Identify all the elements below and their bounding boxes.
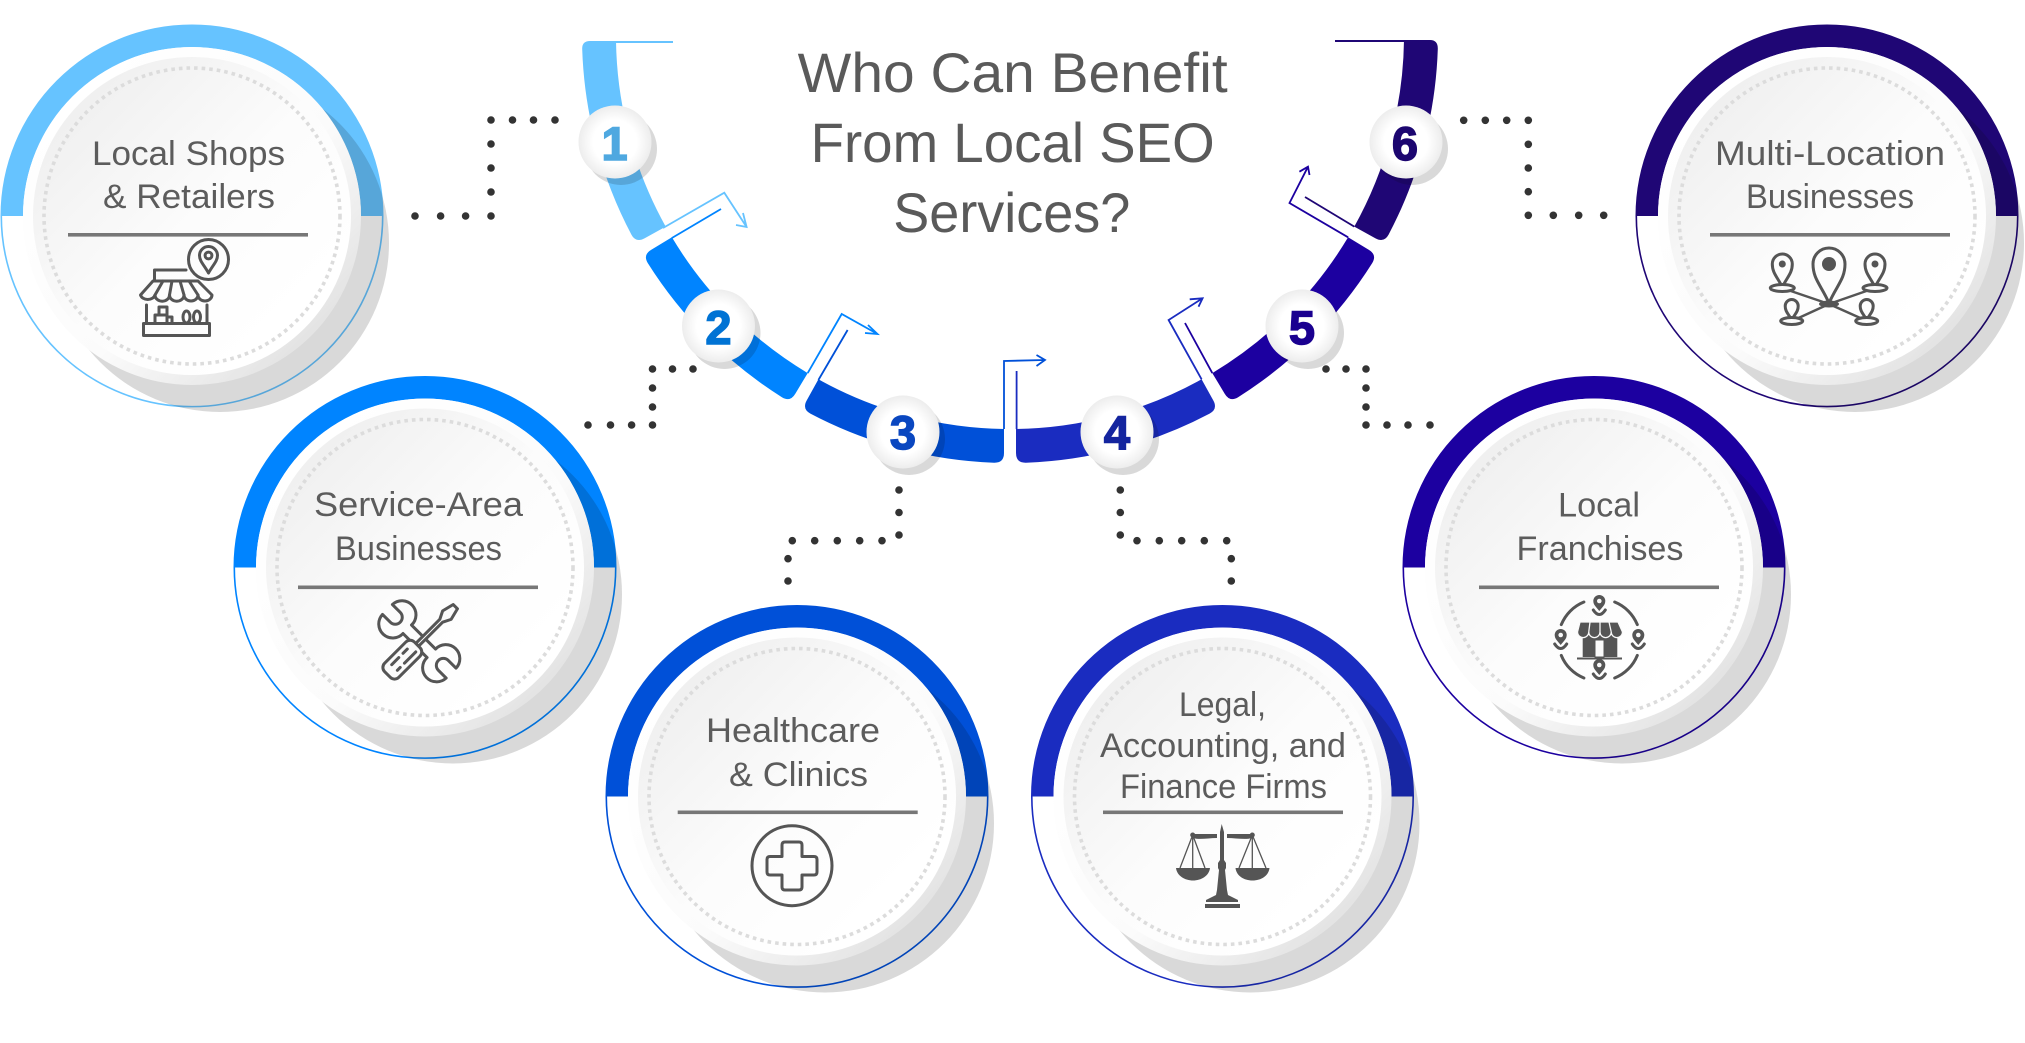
panel: legal, accounting and finance firms xyxy=(1031,605,1420,992)
arrow 5 shadow line xyxy=(1305,197,1354,227)
badge 3 xyxy=(866,396,945,475)
panel: legal, accounting and finance firms: Finance Firms xyxy=(1120,768,1327,806)
title: Services? xyxy=(893,181,1130,244)
ring band xyxy=(606,605,988,796)
top accent line right xyxy=(1335,40,1405,42)
drop shadow xyxy=(1686,74,2024,412)
panel: local franchises xyxy=(1402,376,1791,764)
ring band xyxy=(1402,376,1786,568)
dotted connector 5 xyxy=(1322,365,1434,429)
thin outline xyxy=(234,568,616,758)
badge 6 xyxy=(1370,106,1448,185)
title: From Local SEO xyxy=(811,111,1215,174)
label: Local Shops xyxy=(92,135,285,173)
panel: healthcare and clinics: & Clinics xyxy=(729,756,868,794)
label: Multi-Location xyxy=(1715,135,1945,173)
dotted connector 6 xyxy=(1460,116,1607,219)
arc segment 3 xyxy=(805,379,1004,463)
arc segment 2 xyxy=(646,237,808,399)
thin outline xyxy=(1,216,383,407)
arc segment 6 xyxy=(1354,40,1438,240)
panel: local franchises: Franchises xyxy=(1516,530,1684,568)
badge 2: 2 xyxy=(705,301,732,354)
badge 3: 3 xyxy=(890,406,916,459)
drop shadow xyxy=(656,654,994,992)
badge 1 xyxy=(578,106,657,185)
divider xyxy=(1710,233,1950,237)
label: Service-Area xyxy=(314,486,523,524)
badge 5 xyxy=(1266,290,1344,369)
dotted connector 1 xyxy=(411,116,559,220)
panel: local shops and retailers xyxy=(0,24,389,412)
icon: network of pins xyxy=(1770,248,1887,324)
icon: scales of justice xyxy=(1176,824,1270,908)
disc xyxy=(23,47,361,385)
dotted connector 2 xyxy=(584,365,697,429)
icon: medical cross xyxy=(752,826,832,906)
badge 4 xyxy=(1080,396,1159,475)
dotted connector 3 xyxy=(784,486,903,585)
label: Legal, xyxy=(1179,686,1266,724)
divider xyxy=(678,810,918,814)
arrow 3 shadow line xyxy=(1016,371,1018,429)
panel: legal, accounting and finance firms: Accounting, and xyxy=(1100,727,1346,765)
ring band xyxy=(1636,24,2018,216)
badge 4: 4 xyxy=(1104,406,1130,459)
divider xyxy=(1103,810,1343,814)
drop shadow xyxy=(284,426,622,764)
panel: service-area businesses: Businesses xyxy=(335,530,502,568)
thin outline xyxy=(1032,796,1413,987)
divider xyxy=(298,586,538,589)
icon: store surrounded by pins xyxy=(1555,595,1644,678)
divider xyxy=(68,233,308,237)
arrow 4 xyxy=(1169,298,1203,379)
arrow 2 xyxy=(808,314,878,373)
arrow 1 shadow line xyxy=(672,209,721,238)
label: Healthcare xyxy=(706,712,880,750)
top accent line left xyxy=(615,41,673,43)
icon: shop with location pin xyxy=(140,240,228,336)
panel: multi-location businesses xyxy=(1636,24,2024,412)
badge 2 xyxy=(682,290,760,369)
panel: service-area businesses xyxy=(234,376,622,764)
dotted connector 4 xyxy=(1116,486,1235,585)
disc xyxy=(1425,398,1763,736)
title: Who Can Benefit xyxy=(798,41,1228,104)
panel: multi-location businesses: Businesses xyxy=(1746,178,1914,216)
disc xyxy=(628,628,966,966)
arrow 1 xyxy=(663,193,747,228)
thin outline xyxy=(606,796,988,987)
central arc of six segments xyxy=(582,40,1438,463)
disc xyxy=(1054,628,1392,966)
panel: local shops and retailers: & Retailers xyxy=(103,178,275,216)
drop shadow xyxy=(51,74,389,412)
badge 6: 6 xyxy=(1392,117,1418,170)
thin outline xyxy=(1636,216,2018,407)
badge 5: 5 xyxy=(1289,301,1315,354)
arrow 2 shadow line xyxy=(818,330,848,380)
disc xyxy=(256,398,594,736)
arrow 3 xyxy=(1004,355,1045,429)
arrow 5 xyxy=(1290,167,1348,237)
ring band xyxy=(0,24,384,216)
icon: wrench and screwdriver xyxy=(373,595,466,688)
label: Local xyxy=(1558,486,1640,524)
disc xyxy=(1658,47,1996,385)
arc segment 5 xyxy=(1212,237,1374,399)
thin outline xyxy=(1403,568,1785,758)
arrow 4 shadow line xyxy=(1185,323,1212,373)
arc segment 4 xyxy=(1016,379,1215,463)
drop shadow xyxy=(1082,654,1420,992)
divider xyxy=(1479,586,1719,589)
panel: healthcare and clinics xyxy=(606,605,994,992)
ring band xyxy=(234,376,616,568)
title xyxy=(798,41,1228,244)
ring band xyxy=(1031,605,1414,796)
drop shadow xyxy=(1453,426,1791,764)
arc segment 1 xyxy=(582,41,666,240)
badge 1: 1 xyxy=(602,117,628,170)
